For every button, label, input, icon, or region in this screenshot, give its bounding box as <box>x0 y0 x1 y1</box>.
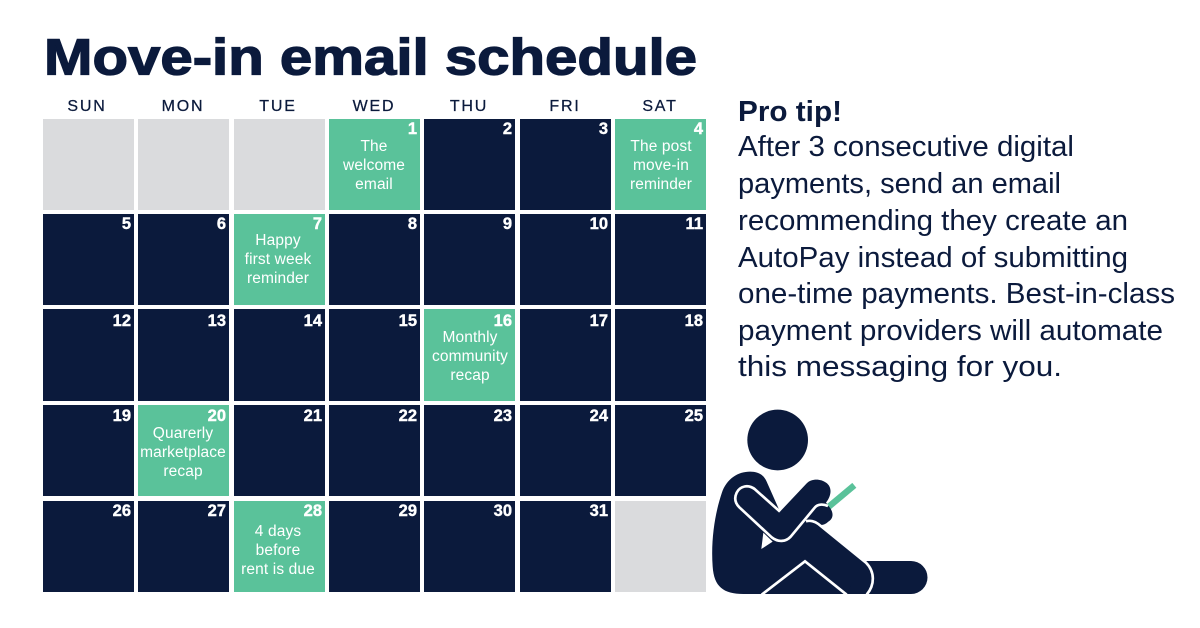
pro tip text: recommending they create an <box>738 205 1128 237</box>
title: Move-in email schedule <box>44 28 697 86</box>
weekday headers: WED <box>353 98 395 115</box>
icon: body <box>712 472 873 594</box>
calendar grid <box>43 119 706 592</box>
week 2 <box>43 214 706 305</box>
weekday headers <box>67 98 678 115</box>
icon: arm outline <box>735 486 828 541</box>
week 1: The post <box>630 138 692 155</box>
week 2: 10 <box>590 215 608 233</box>
week 5: 27 <box>208 502 226 520</box>
week 1: reminder <box>630 176 692 193</box>
week 1: welcome <box>342 157 405 174</box>
week 1: 4 <box>694 120 704 138</box>
week 3: community <box>432 348 508 365</box>
weekday headers: TUE <box>259 98 297 115</box>
pro tip text: Pro tip! <box>738 96 842 128</box>
icon: head <box>747 410 808 470</box>
week 4 <box>43 405 706 496</box>
week 2: 9 <box>503 215 512 233</box>
week 4: 25 <box>685 407 703 425</box>
week 3: 14 <box>304 312 323 330</box>
week 1: 1 <box>408 120 417 138</box>
weekday headers: SAT <box>642 98 678 115</box>
week 2: 5 <box>122 215 131 233</box>
week 3 <box>43 309 706 401</box>
pro tip text: payment providers will automate <box>738 315 1163 347</box>
week 2: 7 <box>313 215 322 233</box>
icon: knee outline <box>806 521 873 595</box>
pro tip text: one-time payments. Best-in-class <box>738 278 1175 310</box>
week 4: 21 <box>304 407 322 425</box>
week 3: recap <box>450 367 490 384</box>
week 3: 13 <box>208 312 226 330</box>
icon: phone <box>828 485 854 507</box>
weekday headers: SUN <box>67 98 107 115</box>
week 3: 17 <box>590 312 608 330</box>
pro tip text: payments, send an email <box>738 168 1061 200</box>
week 5: 30 <box>494 502 512 520</box>
week 5: 26 <box>113 502 131 520</box>
week 3: 15 <box>399 312 417 330</box>
week 1: The <box>360 138 388 155</box>
week 2: 8 <box>408 215 417 233</box>
week 1: 3 <box>599 120 608 138</box>
week 4: 19 <box>113 407 131 425</box>
week 1 <box>43 119 706 210</box>
week 4: 20 <box>208 407 226 425</box>
pro tip text: AutoPay instead of submitting <box>738 242 1128 274</box>
week 2: reminder <box>247 270 309 287</box>
icon: elbow gap <box>761 533 773 549</box>
week 3: 16 <box>494 312 512 330</box>
weekday headers: FRI <box>549 98 581 115</box>
pro tip text: this messaging for you. <box>738 351 1062 383</box>
week 3: Monthly <box>442 329 498 346</box>
week 2: first week <box>245 251 311 268</box>
week 2: 6 <box>217 215 226 233</box>
week 5: 29 <box>399 502 417 520</box>
week 5: before <box>256 542 300 559</box>
icon: lower leg <box>847 561 927 594</box>
weekday headers: MON <box>162 98 204 115</box>
week 2: 11 <box>686 215 703 233</box>
pro tip text: After 3 consecutive digital <box>738 131 1074 163</box>
week 3: 12 <box>113 312 131 330</box>
week 3: 18 <box>685 312 703 330</box>
week 5: 28 <box>304 502 322 520</box>
week 4: marketplace <box>140 444 226 461</box>
week 5: 4 days <box>255 523 301 540</box>
week 5 <box>43 501 706 592</box>
pro tip text <box>738 96 1175 383</box>
week 1: move-in <box>633 157 689 174</box>
week 1: email <box>355 176 393 193</box>
weekday headers: THU <box>450 98 488 115</box>
week 5: rent is due <box>241 561 315 578</box>
icon: person sitting with phone <box>712 410 927 595</box>
week 4: Quarerly <box>153 425 213 442</box>
week 4: recap <box>163 463 203 480</box>
week 4: 23 <box>494 407 512 425</box>
icon: under-knee outline <box>762 561 847 595</box>
week 1: 2 <box>503 120 512 138</box>
week 5: 31 <box>590 502 608 520</box>
week 4: 24 <box>590 407 609 425</box>
week 4: 22 <box>399 407 417 425</box>
week 2: Happy <box>255 232 301 249</box>
